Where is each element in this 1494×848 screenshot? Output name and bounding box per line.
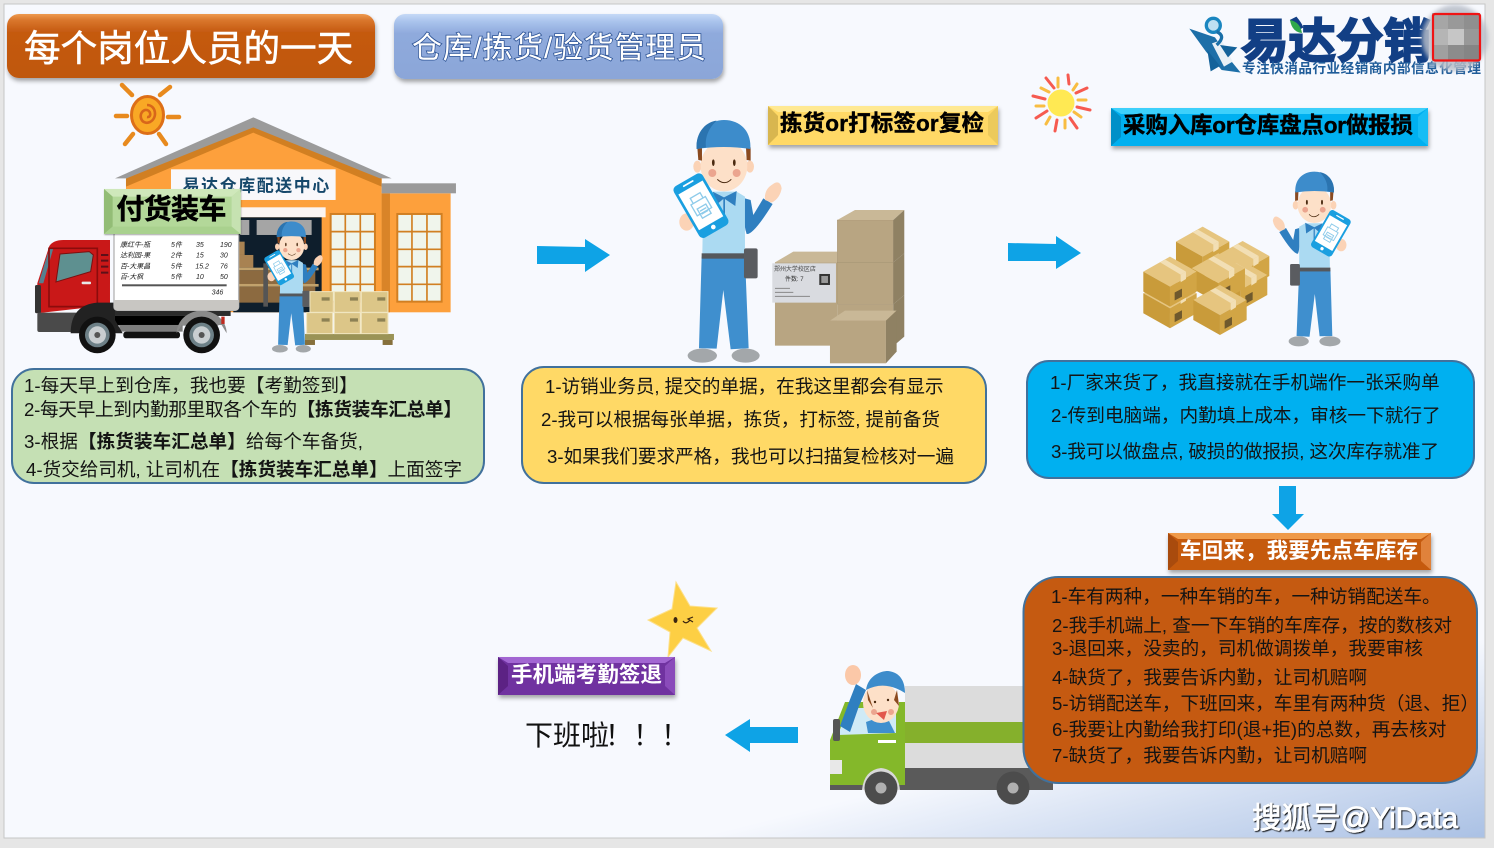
truck cargo: delivery receipt: 35	[196, 242, 204, 249]
driver waving	[840, 665, 905, 733]
truck cab	[830, 702, 905, 790]
icon: yellow sun	[1033, 75, 1090, 131]
label: 拣货or打标签or复检: 拣货or打标签or复检	[780, 110, 984, 136]
arrow: right to step 2	[537, 239, 610, 272]
warehouse building	[115, 117, 456, 312]
panel: 付货装车 steps: 3-根据【拣货装车汇总单】给每个车备货,	[24, 431, 363, 452]
label: 车回来，我要先点车库存: 车回来，我要先点车库存	[1180, 539, 1418, 563]
text: 下班啦: 下班啦！！！	[525, 720, 689, 751]
label: 付货装车	[104, 189, 241, 234]
panel: 车库存 steps: 6-我要让内勤给我打印(退+拒)的总数，再去核对	[1052, 719, 1446, 740]
truck cargo: delivery receipt: 10	[196, 274, 204, 281]
panel: 车库存 steps: 7-缺货了，我要告诉内勤，让司机赔啊	[1052, 745, 1367, 766]
illustration: green truck and waving driver	[830, 665, 1055, 804]
label: 车回来，我要先点车库存	[1168, 533, 1431, 570]
panel: 采购 steps: 3-我可以做盘点, 破损的做报损, 这次库存就准了	[1051, 441, 1439, 462]
shipping label	[772, 263, 836, 303]
truck cargo: delivery receipt: 康红牛-瓶	[120, 241, 151, 249]
panel: 采购 steps	[1027, 361, 1474, 478]
red delivery truck	[35, 240, 231, 353]
logo: 易达分销	[1189, 16, 1481, 76]
logo: 易达分销: 专注快消品行业经销商内部信息化管理	[1242, 60, 1481, 76]
truck cargo: delivery receipt: 百-大果昌	[120, 262, 151, 270]
worker with phone	[672, 120, 782, 363]
arrow: right to step 3	[1008, 236, 1081, 269]
illustration: cardboard boxes with label	[772, 210, 904, 363]
truck cargo: delivery receipt: 15.2	[195, 263, 209, 270]
title: 每个岗位人员的一天: 每个岗位人员的一天	[24, 28, 353, 69]
panel: 车库存 steps: 3-退回来，没卖的，司机做调拨单，我要审核	[1052, 638, 1423, 659]
worker at warehouse	[263, 222, 323, 353]
panel: 拣货 steps: 3-如果我们要求严格，我也可以扫描复检核对一遍	[547, 446, 954, 467]
shipping label: 郑州大学校区店	[774, 265, 816, 273]
subtitle: 仓库/拣货/验货管理员: 仓库/拣货/验货管理员	[412, 32, 706, 65]
shipping label: 件数: 7	[785, 275, 804, 283]
truck cargo: delivery receipt: 76	[220, 263, 228, 270]
icon: smiling star	[648, 582, 717, 657]
label: 采购入库or仓库盘点or做报损: 采购入库or仓库盘点or做报损	[1123, 113, 1413, 138]
arrow: left	[725, 719, 798, 752]
truck cargo: delivery receipt	[114, 232, 239, 310]
panel: 付货装车 steps: 4-货交给司机, 让司机在【拣货装车汇总单】上面签字	[26, 459, 462, 480]
panel: 车库存 steps	[1024, 577, 1479, 783]
worker with phone, mirrored	[1273, 172, 1352, 346]
label: 手机端考勤签退: 手机端考勤签退	[511, 663, 662, 687]
truck cargo: delivery receipt: 2件	[170, 252, 183, 260]
warehouse building: 易达仓库配送中心	[183, 176, 329, 196]
panel: 拣货 steps: 2-我可以根据每张单据，拣货，打标签, 提前备货	[541, 409, 940, 430]
truck cargo: delivery receipt: 5件	[171, 241, 183, 249]
panel: 拣货 steps: 1-访销业务员, 提交的单据，在我这里都会有显示	[545, 376, 944, 397]
truck cargo: delivery receipt: 30	[220, 253, 228, 260]
arrow: down	[1272, 486, 1304, 530]
panel: 车库存 steps: 4-缺货了，我要告诉内勤，让司机赔啊	[1052, 667, 1367, 688]
truck cargo: delivery receipt: 190	[220, 242, 232, 249]
truck cargo: delivery receipt: 15	[196, 253, 204, 260]
truck cargo box	[830, 686, 1055, 790]
panel: 采购 steps: 2-传到电脑端，内勤填上成本，审核一下就行了	[1051, 405, 1441, 426]
panel: 付货装车 steps: 1-每天早上到仓库，我也要【考勤签到】	[24, 375, 358, 396]
truck cargo: delivery receipt: 百-大枫	[120, 273, 144, 281]
panel: 付货装车 steps	[12, 369, 484, 483]
illustration: stacked parcels	[1143, 227, 1269, 335]
truck cargo: delivery receipt: 50	[220, 274, 228, 281]
icon: rocket	[1189, 18, 1241, 73]
panel: 车库存 steps: 5-访销配送车，下班回来，车里有两种货（退、拒）	[1052, 693, 1479, 714]
label: 手机端考勤签退	[498, 657, 675, 695]
pallet of boxes	[305, 292, 394, 345]
title: 每个岗位人员的一天	[7, 14, 375, 78]
truck cargo: delivery receipt: 346	[212, 289, 223, 296]
truck cargo: delivery receipt: 5件	[171, 262, 183, 270]
label: 采购入库or仓库盘点or做报损	[1111, 108, 1428, 146]
label: 付货装车: 付货装车	[116, 194, 226, 225]
blurred mosaic badge	[1422, 5, 1488, 71]
panel: 付货装车 steps: 2-每天早上到内勤那里取各个车的【拣货装车汇总单】	[24, 399, 462, 420]
illustration: warehouse, truck and worker	[35, 117, 456, 353]
panel: 拣货 steps	[522, 367, 986, 483]
icon: green leaf	[1290, 20, 1302, 33]
label: 拣货or打标签or复检	[768, 106, 998, 145]
truck cargo: delivery receipt: 5件	[171, 273, 183, 281]
icon: orange spiral sun	[116, 85, 179, 144]
panel: 车库存 steps: 1-车有两种，一种车销的车，一种访销配送车。	[1051, 586, 1441, 607]
panel: 采购 steps: 1-厂家来货了，我直接就在手机端作一张采购单	[1050, 372, 1440, 393]
panel: 车库存 steps: 2-我手机端上, 查一下车销的车库存，按的数核对	[1052, 615, 1452, 636]
truck cargo: delivery receipt: 达利园-果	[120, 252, 151, 260]
watermark: 搜狐号@YiData: 搜狐号@YiData	[1252, 802, 1459, 835]
subtitle: 仓库/拣货/验货管理员	[394, 14, 723, 79]
logo: 易达分销: 易达分销	[1241, 16, 1431, 69]
